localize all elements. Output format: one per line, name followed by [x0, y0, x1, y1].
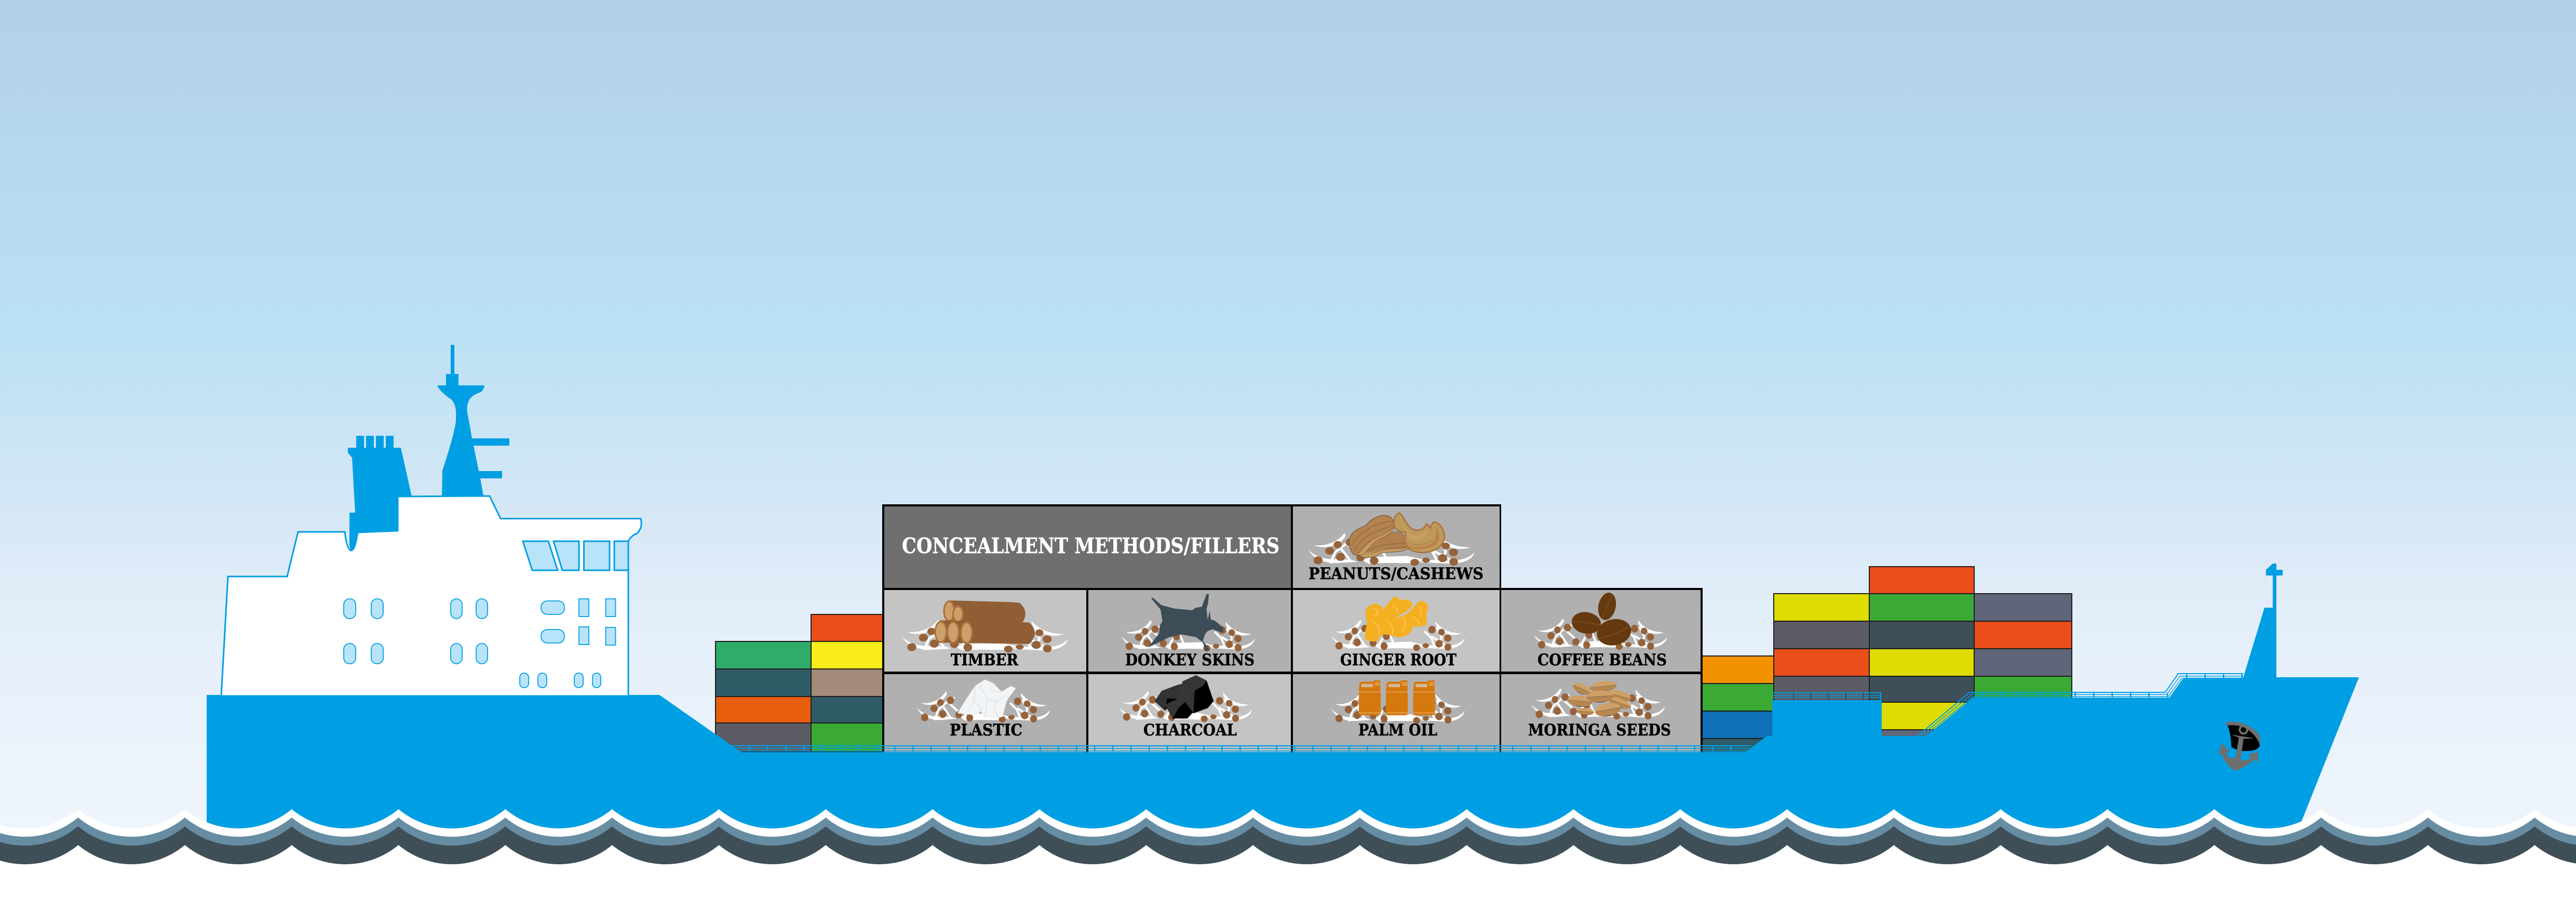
- icon: timber logs: [934, 600, 1035, 644]
- cell: plastic: [884, 674, 1086, 753]
- cell: charcoal: CHARCOAL: [1143, 721, 1237, 740]
- cell: charcoal: [1088, 674, 1291, 753]
- icon: palm oil jugs: [1359, 680, 1435, 715]
- deck railings: [730, 674, 2243, 751]
- waves: [0, 809, 2576, 911]
- cell: plastic: PLASTIC: [950, 721, 1022, 740]
- cell: peanuts/cashews: [1293, 506, 1500, 588]
- ship hull with bow mast: [207, 564, 2359, 852]
- icon: anchor: [2218, 721, 2260, 771]
- cell: palm oil: PALM OIL: [1358, 721, 1437, 740]
- superstructure: [221, 496, 641, 696]
- icon: coffee beans: [1570, 591, 1634, 649]
- cell: timber: [884, 590, 1086, 672]
- cell: palm oil: [1293, 674, 1500, 753]
- cell: coffee beans: COFFEE BEANS: [1537, 651, 1667, 669]
- cell: ginger root: [1293, 590, 1500, 672]
- panel heading: concealment methods: [884, 506, 1291, 588]
- cell: donkey skins: [1088, 590, 1291, 672]
- cell: ginger root: GINGER ROOT: [1340, 651, 1456, 669]
- cell: coffee beans: [1501, 590, 1701, 672]
- icon: donkey skin: [1148, 594, 1223, 651]
- radar mast: [437, 345, 509, 496]
- icon: charcoal: [1155, 675, 1213, 718]
- portholes: [344, 599, 616, 688]
- cell: moringa seeds: [1501, 674, 1701, 753]
- cell: donkey skins: DONKEY SKINS: [1125, 651, 1255, 669]
- windows: [344, 541, 628, 688]
- containers: forward stack: [1702, 567, 2072, 754]
- funnel: [348, 436, 412, 551]
- panel heading: concealment methods: CONCEALMENT METHODS/FILLERS: [902, 533, 1279, 558]
- cell: timber: TIMBER: [951, 651, 1018, 669]
- cell: peanuts/cashews: PEANUTS/CASHEWS: [1309, 565, 1483, 583]
- icon: plastic: [957, 679, 1016, 718]
- icon: peanuts and cashews: [1349, 513, 1445, 558]
- bridge windows: [523, 541, 628, 570]
- cell: moringa seeds: MORINGA SEEDS: [1528, 721, 1671, 740]
- icon: ginger root: [1366, 597, 1426, 640]
- containers: aft stack: [716, 614, 883, 752]
- panel: concealment methods grid: [882, 504, 1703, 753]
- icon: moringa seeds: [1568, 680, 1633, 718]
